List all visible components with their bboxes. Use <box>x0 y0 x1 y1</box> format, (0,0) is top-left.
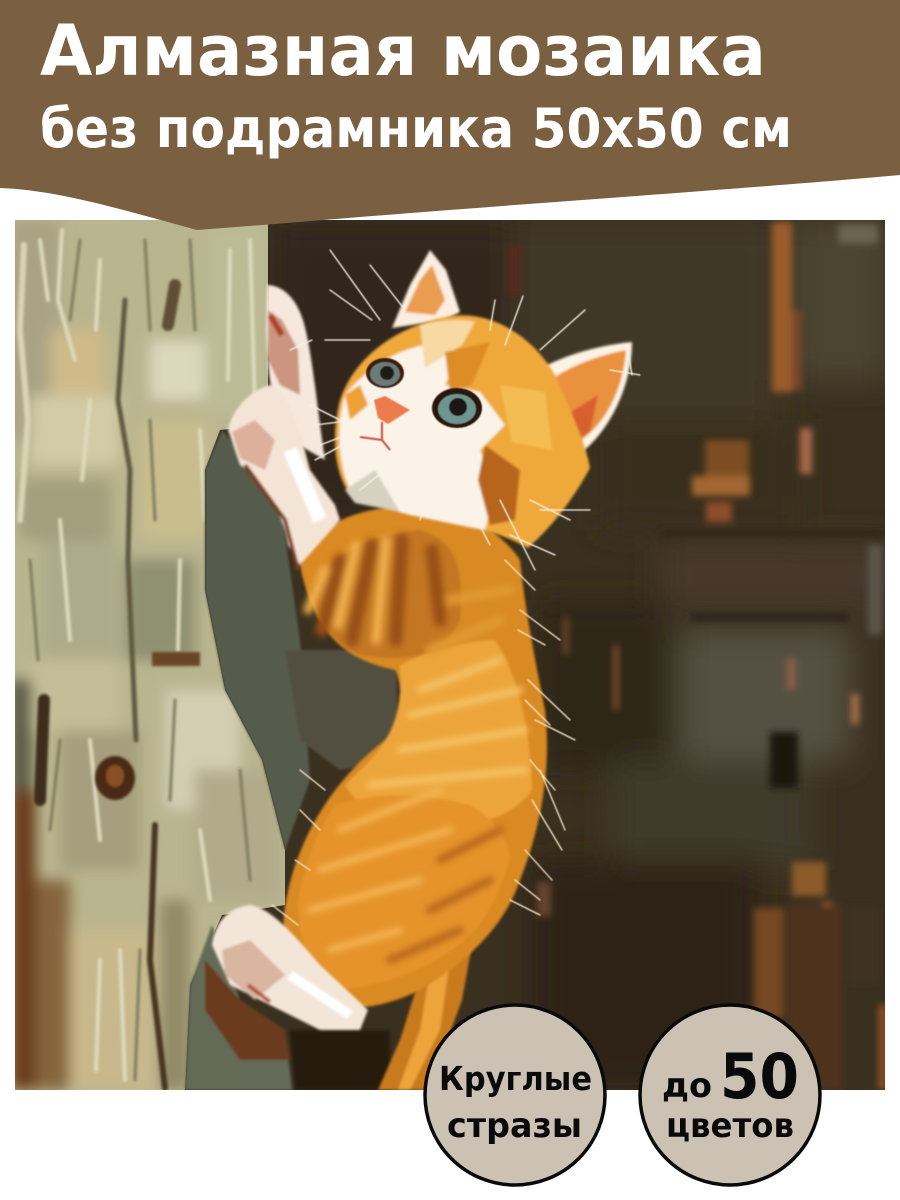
dark background wall <box>185 220 885 1090</box>
badge: up to 50 colours: до <box>662 1066 712 1106</box>
body <box>283 505 547 1007</box>
title line 1: Алмазная мозаика <box>40 10 766 92</box>
lower paw <box>212 905 368 1030</box>
header banner <box>0 0 900 230</box>
badge: round rhinestones <box>425 1005 605 1185</box>
badge: up to 50 colours: цветов <box>666 1106 794 1146</box>
body whisker-like fur highlights <box>272 560 575 925</box>
shadow on the post behind the cat <box>185 430 400 1090</box>
painting: ginger kitten climbing a post <box>10 220 890 1090</box>
eyes <box>366 358 482 428</box>
whiskers <box>290 250 640 570</box>
right ear <box>546 340 634 451</box>
tail <box>378 945 472 1090</box>
right eye <box>432 388 482 428</box>
kitten <box>212 250 640 1090</box>
badge: round rhinestones: стразы <box>447 1106 582 1146</box>
lower raised paw and arm <box>228 385 340 570</box>
badge: up to 50 colours <box>640 1005 820 1185</box>
nose and mouth <box>360 396 410 450</box>
badge: up to 50 colours: 50 <box>720 1040 799 1113</box>
wooden post <box>10 220 285 1090</box>
body fur strokes <box>308 540 525 960</box>
title line 2: без подрамника 50х50 см <box>40 97 792 160</box>
left eye <box>366 358 404 388</box>
left ear <box>392 250 460 328</box>
badge: round rhinestones: Круглые <box>439 1059 592 1098</box>
upper raised paw <box>266 285 325 460</box>
head <box>335 315 590 548</box>
